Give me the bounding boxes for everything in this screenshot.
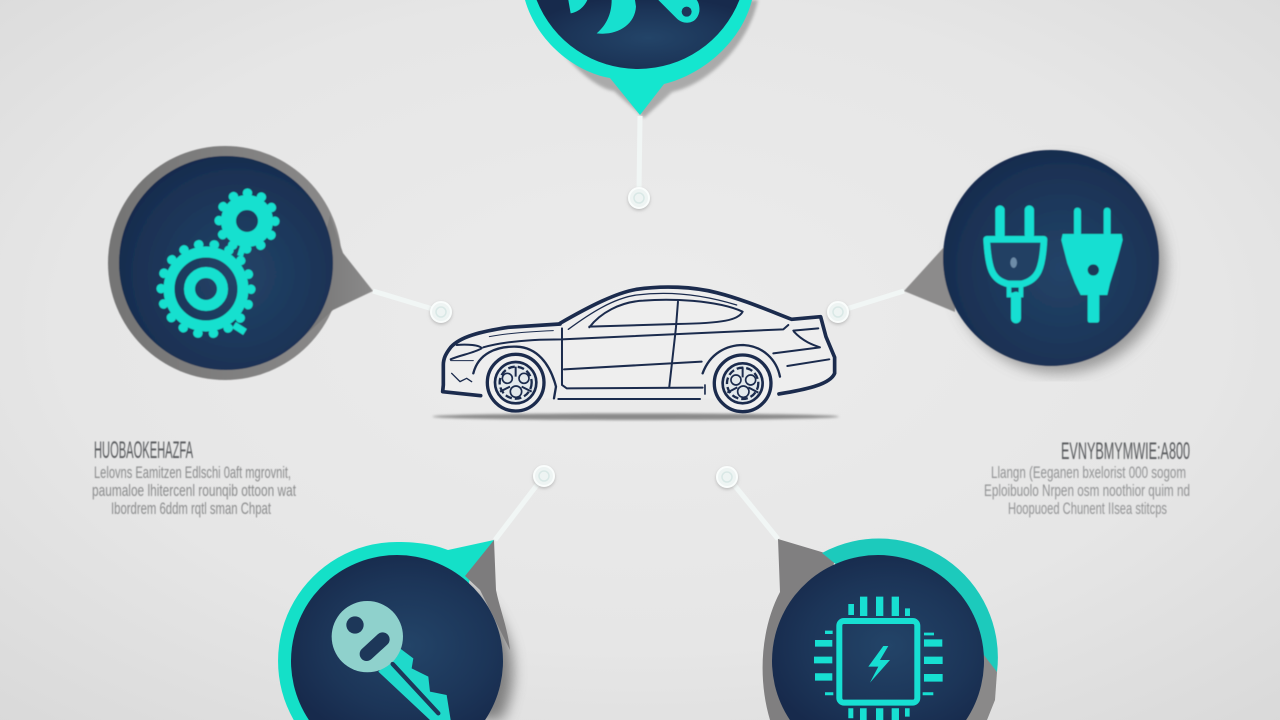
icon: wrench (568, 0, 699, 34)
ground shadow (432, 413, 839, 420)
grey right ring (950, 645, 997, 720)
navy disc (772, 555, 984, 720)
panel: bottom-left key badge (278, 540, 513, 720)
navy disc (537, 0, 739, 69)
teal arc (822, 539, 998, 672)
connector: right (828, 291, 904, 322)
solid plug (1061, 208, 1123, 323)
badge shadow (535, 0, 758, 118)
plug highlight (1010, 257, 1017, 268)
outlined plug (987, 210, 1044, 318)
icon: chip (814, 597, 943, 720)
icon: plugs (987, 208, 1123, 323)
panel: bottom-right chip badge (763, 539, 998, 720)
connector: top (629, 116, 649, 208)
icon: gears (161, 193, 275, 334)
icon: key (332, 601, 451, 720)
connector: bottom-left (495, 466, 554, 540)
text block: left caption (92, 437, 296, 518)
right body line 3: Hoopuoed Chunent IIsea stitcps (1008, 499, 1167, 518)
text block: left caption: HUOBAOKEHAZFA (94, 437, 193, 464)
grey left ring and pointer (763, 539, 835, 720)
connector: left (373, 291, 451, 322)
car body fill (443, 288, 835, 398)
grey pointer (904, 235, 955, 312)
right body line 2: Eploibuolo Nrpen osm noothior quim nd (984, 481, 1190, 500)
navy disc (291, 555, 503, 720)
right body line 1: Llangn (Eeganen bxelorist 000 sogom (991, 463, 1186, 482)
front wheel (487, 354, 544, 411)
left body line 2: paumaloe lhitercenl rounqib ottoon wat (92, 481, 296, 500)
text block: right caption (984, 438, 1190, 518)
teal ring and pointer (525, 0, 752, 115)
rear wheel (714, 355, 771, 412)
badge shadow (952, 159, 1166, 373)
navy disc (119, 156, 333, 370)
connector: bottom-right (717, 467, 778, 539)
badge shadow (301, 566, 513, 720)
teal ring and pointer (278, 540, 494, 720)
panel: top wrench badge (525, 0, 758, 118)
grey ring and pointer (108, 146, 373, 380)
panel: left gears badge (108, 146, 373, 380)
navy disc (943, 150, 1159, 366)
grey wedge (465, 540, 510, 650)
left body line 3: Ibordrem 6ddm rqtl sman Chpat (111, 499, 271, 518)
car outline (443, 287, 835, 399)
left body line 1: Lelovns Eamitzen Edlschi 0aft mgrovnit, (94, 463, 291, 482)
panel: right plugs badge (904, 150, 1166, 373)
car illustration (432, 287, 839, 420)
